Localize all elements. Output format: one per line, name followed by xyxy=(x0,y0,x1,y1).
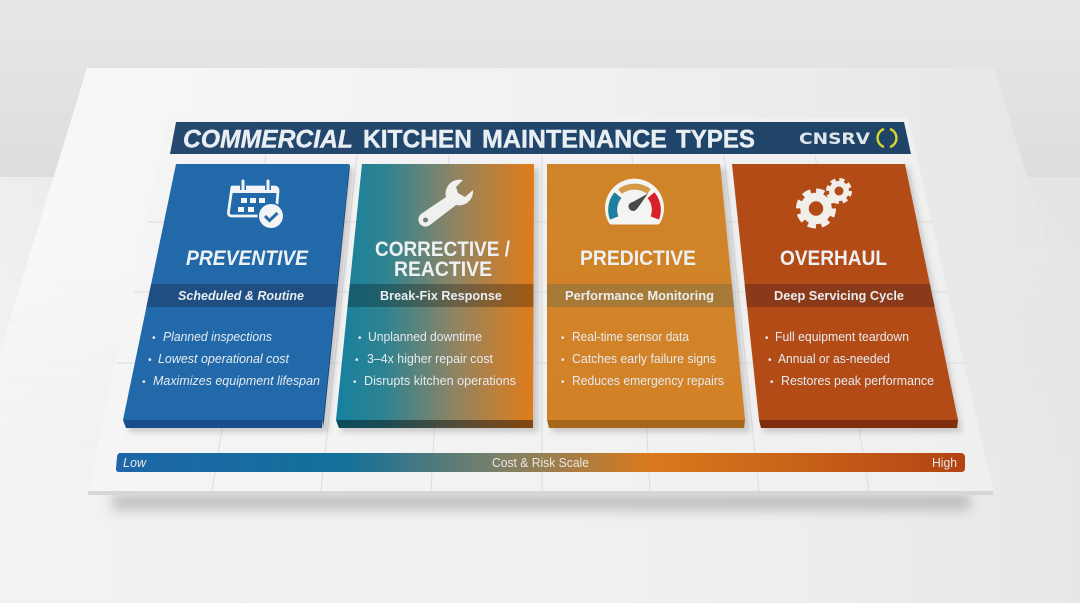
bullet list: predictive: Catches early failure signs xyxy=(572,352,716,366)
icon: calendar with check xyxy=(228,181,284,230)
heading: corrective / reactive: REACTIVE xyxy=(394,258,492,281)
scale label: cost and risk: Cost & Risk Scale xyxy=(492,455,589,470)
heading: corrective / reactive xyxy=(375,238,510,281)
cost and risk scale bar xyxy=(116,453,965,472)
bullet list: preventive xyxy=(142,330,320,388)
bullet list: overhaul: • xyxy=(770,377,774,388)
bullet list: overhaul: • xyxy=(768,355,772,366)
heading: preventive: PREVENTIVE xyxy=(186,247,309,270)
bullet list: corrective: Unplanned downtime xyxy=(368,330,482,344)
bullet list: preventive: • xyxy=(148,355,152,366)
main sheet xyxy=(88,118,993,495)
bullet list: predictive: • xyxy=(561,377,565,388)
sheet grid lines xyxy=(117,155,965,491)
title text: TYPES xyxy=(676,126,755,154)
title text xyxy=(183,126,755,154)
bullet list: predictive xyxy=(561,330,724,388)
bullet list: preventive: Planned inspections xyxy=(163,330,272,344)
bullet list: predictive: • xyxy=(561,355,565,366)
scale label: high: High xyxy=(932,455,957,470)
bullet list: corrective xyxy=(353,330,516,388)
heading: predictive: PREDICTIVE xyxy=(580,247,696,270)
bullet list: predictive: • xyxy=(561,333,565,344)
band: break-fix response: Break-Fix Response xyxy=(380,288,502,303)
title text: COMMERCIAL xyxy=(183,126,353,154)
panel: preventive xyxy=(120,164,352,428)
icon: gauge xyxy=(605,179,664,224)
icon: wrench xyxy=(418,180,473,227)
bullet list: corrective: • xyxy=(358,333,362,344)
card shadows xyxy=(128,168,962,432)
panel: overhaul xyxy=(730,164,960,428)
bullet list: overhaul: Full equipment teardown xyxy=(775,330,909,344)
bullet list: overhaul: • xyxy=(765,333,769,344)
band: deep servicing cycle: Deep Servicing Cycle xyxy=(774,288,904,303)
band: performance monitoring: Performance Monitoring xyxy=(565,288,714,303)
bullet list: preventive: • xyxy=(152,333,156,344)
bullet list: corrective: 3–4x higher repair cost xyxy=(367,352,494,366)
bullet list: preventive: Maximizes equipment lifespan xyxy=(153,374,320,388)
title text: KITCHEN xyxy=(363,126,472,154)
panel: corrective / reactive xyxy=(330,164,540,428)
logo: CNSRV xyxy=(799,129,896,148)
band: performance monitoring xyxy=(547,284,734,307)
back board xyxy=(18,68,1027,296)
logo: CNSRV: CNSRV xyxy=(799,129,871,148)
bullet list: predictive: Reduces emergency repairs xyxy=(572,374,724,388)
bullet list: overhaul xyxy=(765,330,934,388)
bullet list: corrective: • xyxy=(355,355,359,366)
bullet list: overhaul: Restores peak performance xyxy=(781,374,934,388)
band: scheduled and routine xyxy=(146,284,337,307)
band: scheduled and routine: Scheduled & Routine xyxy=(178,288,304,303)
bullet list: overhaul: Annual or as-needed xyxy=(778,352,890,366)
icon: gears xyxy=(799,180,850,226)
bullet list: predictive: Real-time sensor data xyxy=(572,330,689,344)
title banner xyxy=(170,122,911,154)
heading: overhaul: OVERHAUL xyxy=(780,247,887,270)
bullet list: preventive: Lowest operational cost xyxy=(158,352,290,366)
bullet list: corrective: • xyxy=(353,377,357,388)
heading: corrective / reactive: CORRECTIVE / xyxy=(375,238,510,261)
band: deep servicing cycle xyxy=(744,284,935,307)
bullet list: preventive: • xyxy=(142,377,146,388)
board shadow xyxy=(112,494,970,510)
panel: predictive xyxy=(540,164,750,428)
bullet list: corrective: Disrupts kitchen operations xyxy=(364,374,516,388)
band: break-fix response xyxy=(348,284,534,307)
title text: MAINTENANCE xyxy=(482,126,667,154)
scale label: low: Low xyxy=(123,455,148,470)
